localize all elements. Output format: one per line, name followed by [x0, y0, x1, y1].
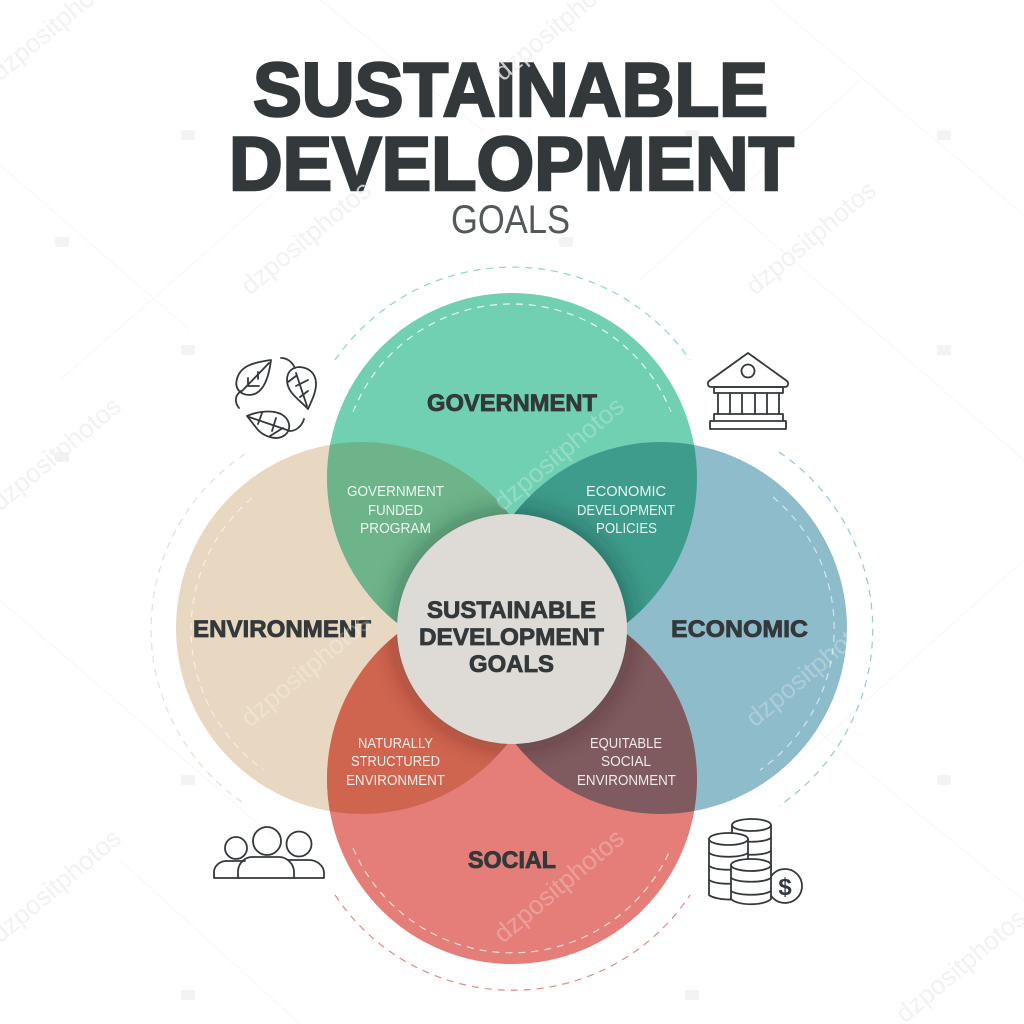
panel: government circle — [327, 293, 697, 663]
text: government funded program: PROGRAM — [360, 520, 431, 537]
text: equitable social environment: SOCIAL — [601, 753, 651, 770]
text: equitable social environment: EQUITABLE — [590, 735, 662, 752]
label: economic: ECONOMIC — [671, 616, 808, 643]
title: DEVELOPMENT — [229, 122, 794, 207]
center text: GOALS — [469, 651, 554, 678]
icon: bank building — [708, 353, 788, 429]
text: naturally structured environment: ENVIRONMENT — [346, 772, 445, 789]
text: naturally structured environment: STRUCTURED — [351, 753, 440, 770]
center text: DEVELOPMENT — [419, 624, 604, 651]
panel: economic circle — [475, 442, 847, 814]
panel: social circle — [327, 594, 697, 964]
text: naturally structured environment — [346, 735, 445, 789]
text: economic development policies — [577, 483, 675, 537]
text: government funded program: GOVERNMENT — [347, 483, 444, 500]
label: environment: ENVIRONMENT — [193, 616, 371, 643]
label: social: SOCIAL — [468, 847, 556, 874]
text: naturally structured environment: NATURALLY — [358, 735, 433, 752]
text: economic development policies: POLICIES — [596, 520, 657, 537]
watermarks: dzpositphotos — [488, 822, 630, 949]
icon: coin stacks with dollar — [709, 819, 802, 904]
center circle — [397, 514, 627, 744]
overlap: social and economic — [516, 634, 697, 814]
title: GOALS — [451, 198, 570, 242]
label: government: GOVERNMENT — [427, 390, 597, 417]
text: equitable social environment: ENVIRONMENT — [577, 772, 676, 789]
watermarks: dzpositphotos — [740, 174, 882, 301]
icon: recycling leaves — [236, 358, 316, 438]
icon: coin stacks with dollar: $ — [778, 874, 792, 901]
center text — [419, 597, 604, 678]
watermarks: dzpositphotos — [740, 606, 882, 733]
text: government funded program — [347, 483, 444, 537]
title: SUSTAINABLE — [253, 48, 768, 133]
overlap: social and environment — [327, 634, 508, 814]
overlap: government and environment — [327, 442, 509, 623]
watermarks: dzpositphotos — [235, 174, 377, 301]
dashed arcs — [151, 267, 873, 990]
panel: environment circle — [176, 442, 548, 814]
text: equitable social environment — [577, 735, 676, 789]
text: economic development policies: ECONOMIC — [586, 483, 666, 500]
text: government funded program: FUNDED — [368, 502, 423, 519]
watermarks: dzpositphotos — [235, 606, 377, 733]
watermarks: dzpositphotos — [488, 390, 630, 517]
text: economic development policies: DEVELOPMENT — [577, 502, 675, 519]
overlap: government and economic — [514, 442, 697, 623]
title — [229, 48, 794, 242]
icon: group of people — [214, 827, 324, 878]
center text: SUSTAINABLE — [427, 597, 596, 624]
